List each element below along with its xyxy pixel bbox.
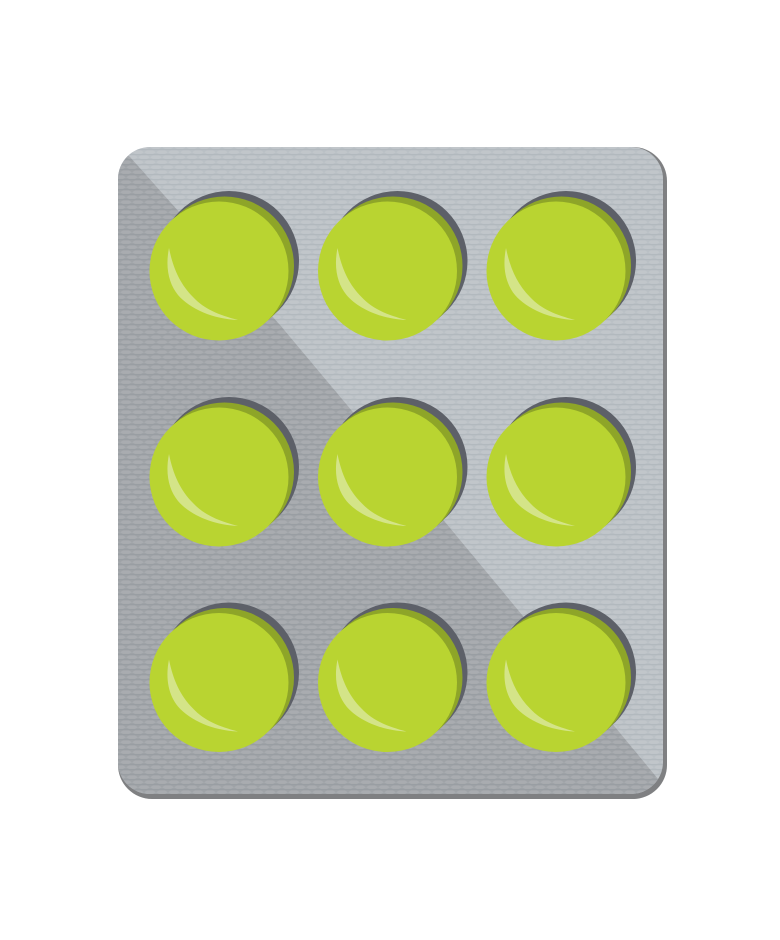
pill row 2, column 2 <box>318 397 468 546</box>
illustration: blister pack of nine green pills <box>118 147 667 799</box>
pill row 1, column 1 <box>150 191 299 340</box>
pill row 2, column 3 <box>486 397 636 546</box>
pill row 3, column 1 <box>150 602 299 752</box>
blister card <box>118 147 667 799</box>
pill row 2, column 1 <box>150 397 299 546</box>
foil texture <box>118 147 663 794</box>
pill row 3, column 2 <box>318 602 468 752</box>
pill row 1, column 3 <box>486 191 636 340</box>
pill row 3, column 3 <box>486 602 636 752</box>
card shaded diagonal area <box>118 147 663 794</box>
card edge shadow <box>118 147 667 799</box>
pill row 1, column 2 <box>318 191 468 340</box>
card light foil face <box>118 147 663 794</box>
